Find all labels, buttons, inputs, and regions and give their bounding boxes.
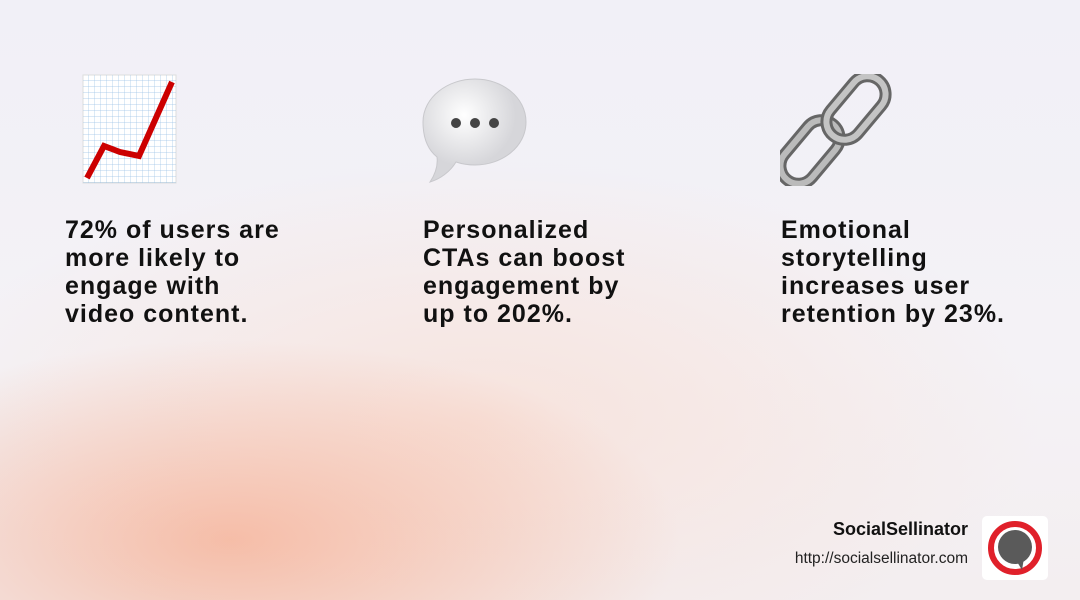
text: stat 3: increases user [781,272,970,300]
text: stat 2: Personalized [423,216,589,244]
text: stat 1: more likely to [65,244,240,272]
brand url: http://socialsellinator.com [795,550,968,567]
text: stat 3: storytelling [781,244,928,272]
text: stat 2: CTAs can boost [423,244,625,272]
text: stat 3: Emotional [781,216,911,244]
text: stat 1: video content. [65,300,248,328]
logo [982,516,1048,580]
text: stat 3 [781,216,1005,328]
text: stat 2: up to 202%. [423,300,573,328]
brand name: SocialSellinator [833,519,968,539]
text: stat 1: 72% of users are [65,216,280,244]
icon: speech bubble [422,78,526,183]
icon: chart [82,74,176,184]
text: stat 1 [65,216,280,328]
text: stat 2 [423,216,625,328]
text: stat 3: retention by 23%. [781,300,1005,328]
icon: chain link [780,74,892,186]
text: stat 1: engage with [65,272,220,300]
text: stat 2: engagement by [423,272,619,300]
